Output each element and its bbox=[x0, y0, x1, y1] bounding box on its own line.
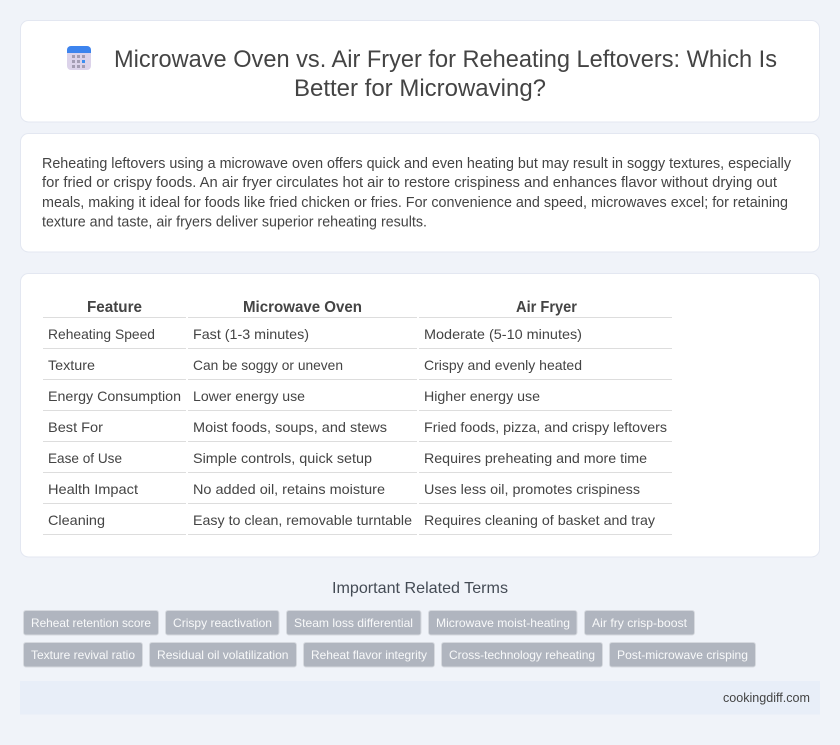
chip bbox=[24, 610, 158, 635]
row: cleaning: Cleaning bbox=[48, 512, 105, 528]
row: health impact: Health Impact bbox=[48, 481, 138, 497]
footer bar bbox=[20, 681, 820, 714]
panel: comparison table bbox=[20, 274, 820, 557]
row: health impact: Uses less oil, promotes crispiness bbox=[424, 481, 640, 497]
row: ease of use: Requires preheating and more time bbox=[424, 450, 647, 466]
row: health impact: No added oil, retains moisture bbox=[193, 481, 385, 497]
table header: Air Fryer bbox=[516, 299, 577, 316]
chip: Texture revival ratio bbox=[31, 648, 135, 662]
summary text bbox=[42, 156, 792, 230]
row: energy consumption: Higher energy use bbox=[424, 388, 540, 404]
heading: related terms: Important Related Terms bbox=[332, 580, 508, 597]
row: energy consumption: Lower energy use bbox=[193, 388, 305, 404]
icon: microwave calendar grid bbox=[67, 46, 91, 70]
related term chips bbox=[24, 610, 756, 667]
chip bbox=[304, 642, 434, 667]
row: cleaning bbox=[48, 512, 655, 528]
row: ease of use bbox=[48, 450, 647, 466]
chip bbox=[610, 642, 756, 667]
row: texture: Crispy and evenly heated bbox=[424, 357, 582, 373]
row: cleaning: Easy to clean, removable turntable bbox=[193, 512, 412, 528]
chip bbox=[150, 642, 296, 667]
chip bbox=[166, 610, 279, 635]
panel: summary paragraph bbox=[20, 134, 820, 252]
row: reheating speed: Moderate (5-10 minutes) bbox=[424, 326, 582, 342]
chip: Air fry crisp-boost bbox=[592, 616, 688, 630]
row: energy consumption bbox=[48, 388, 540, 404]
row: reheating speed bbox=[48, 326, 582, 342]
table header: Microwave Oven bbox=[243, 299, 362, 316]
chip bbox=[428, 610, 577, 635]
chip: Steam loss differential bbox=[294, 616, 413, 630]
row: texture: Texture bbox=[48, 357, 95, 373]
row: best for bbox=[48, 419, 667, 435]
chip: Reheat retention score bbox=[31, 616, 151, 630]
chip bbox=[442, 642, 602, 667]
row: texture: Can be soggy or uneven bbox=[193, 357, 343, 373]
summary text: Reheating leftovers using a microwave oven offers quick and even heating but may result in soggy textures, especially bbox=[42, 156, 792, 172]
row: ease of use: Simple controls, quick setup bbox=[193, 450, 372, 466]
chip bbox=[24, 642, 142, 667]
title: Microwave Oven vs. Air Fryer for Reheating Leftovers: Which Is bbox=[114, 46, 777, 73]
chip: Reheat flavor integrity bbox=[311, 648, 427, 662]
chip: Residual oil volatilization bbox=[157, 648, 288, 662]
table header: Feature bbox=[87, 299, 142, 316]
row: best for: Moist foods, soups, and stews bbox=[193, 419, 387, 435]
row: energy consumption: Energy Consumption bbox=[48, 388, 181, 404]
row: best for: Fried foods, pizza, and crispy leftovers bbox=[424, 419, 667, 435]
title bbox=[114, 46, 777, 102]
row: texture bbox=[48, 357, 582, 373]
row: reheating speed: Reheating Speed bbox=[48, 326, 155, 342]
chip: Post-microwave crisping bbox=[617, 648, 748, 662]
row: ease of use: Ease of Use bbox=[48, 450, 122, 466]
title: Better for Microwaving? bbox=[294, 75, 546, 102]
row: health impact bbox=[48, 481, 640, 497]
chip bbox=[286, 610, 421, 635]
row: cleaning: Requires cleaning of basket and tray bbox=[424, 512, 655, 528]
footer bar: cookingdiff.com bbox=[723, 690, 810, 705]
summary text: for fried or crispy foods. An air fryer circulates hot air to restore crispiness and enhances flavor without drying out bbox=[42, 175, 777, 191]
panel: title header bbox=[20, 20, 820, 122]
chip bbox=[584, 610, 694, 635]
row: best for: Best For bbox=[48, 419, 103, 435]
chip: Microwave moist-heating bbox=[436, 616, 570, 630]
summary text: texture and taste, air fryers deliver superior reheating results. bbox=[42, 214, 427, 230]
chip: Crispy reactivation bbox=[173, 616, 272, 630]
summary text: meals, making it ideal for foods like fried chicken or fries. For convenience and speed, microwaves excel; for retaining bbox=[42, 195, 788, 211]
table header bbox=[87, 299, 577, 316]
row: reheating speed: Fast (1-3 minutes) bbox=[193, 326, 309, 342]
chip: Cross-technology reheating bbox=[449, 648, 595, 662]
